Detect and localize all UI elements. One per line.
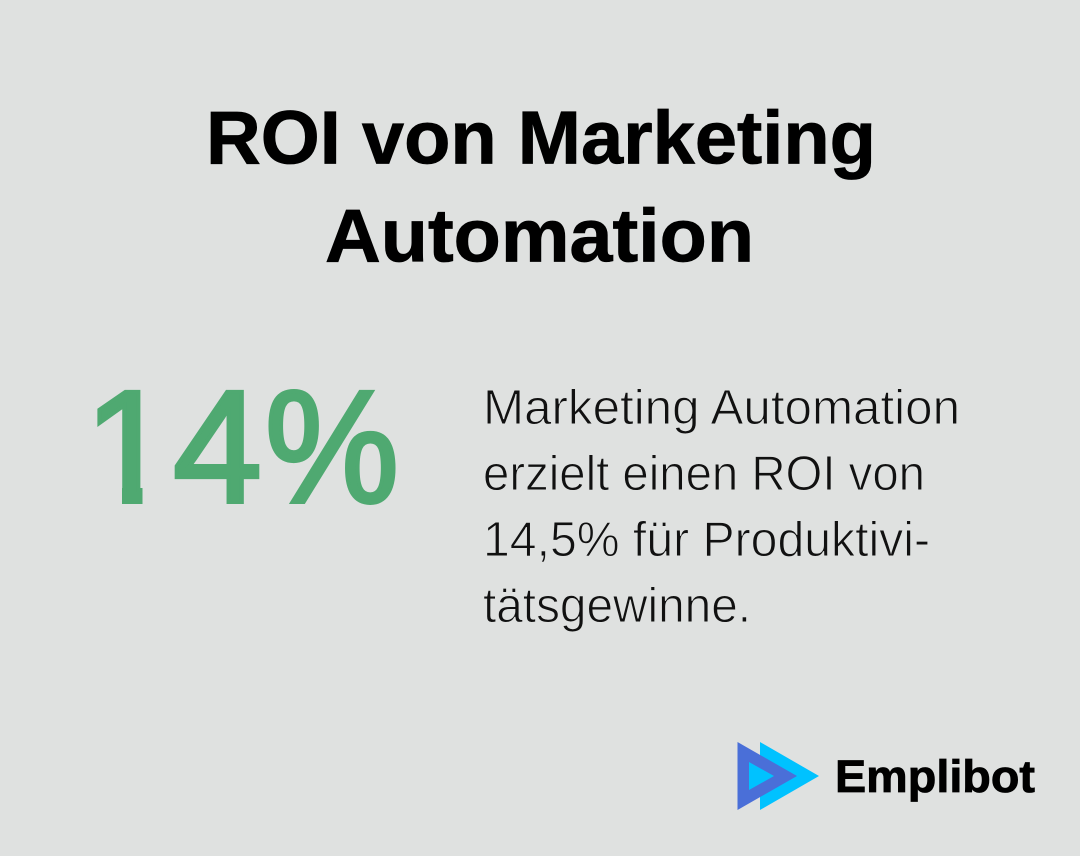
description text — [483, 381, 960, 633]
icon: play triangles — [738, 742, 819, 810]
big stat: 14%: 4 — [173, 357, 262, 536]
wordmark: Emplibot — [835, 751, 1035, 802]
logo: Emplibot — [738, 742, 1035, 810]
description text: Marketing Automation — [483, 381, 960, 435]
title — [206, 96, 876, 278]
description text: erzielt einen ROI von — [483, 447, 925, 501]
big stat: 14%: % — [265, 357, 399, 536]
title: Automation — [325, 194, 754, 278]
big stat: 14% — [84, 357, 399, 536]
description text: 14,5% für Produktivi- — [483, 513, 930, 567]
title: ROI von Marketing — [206, 96, 876, 180]
big stat: 14%: 1 — [84, 357, 173, 536]
description text: tätsgewinne. — [483, 579, 751, 633]
